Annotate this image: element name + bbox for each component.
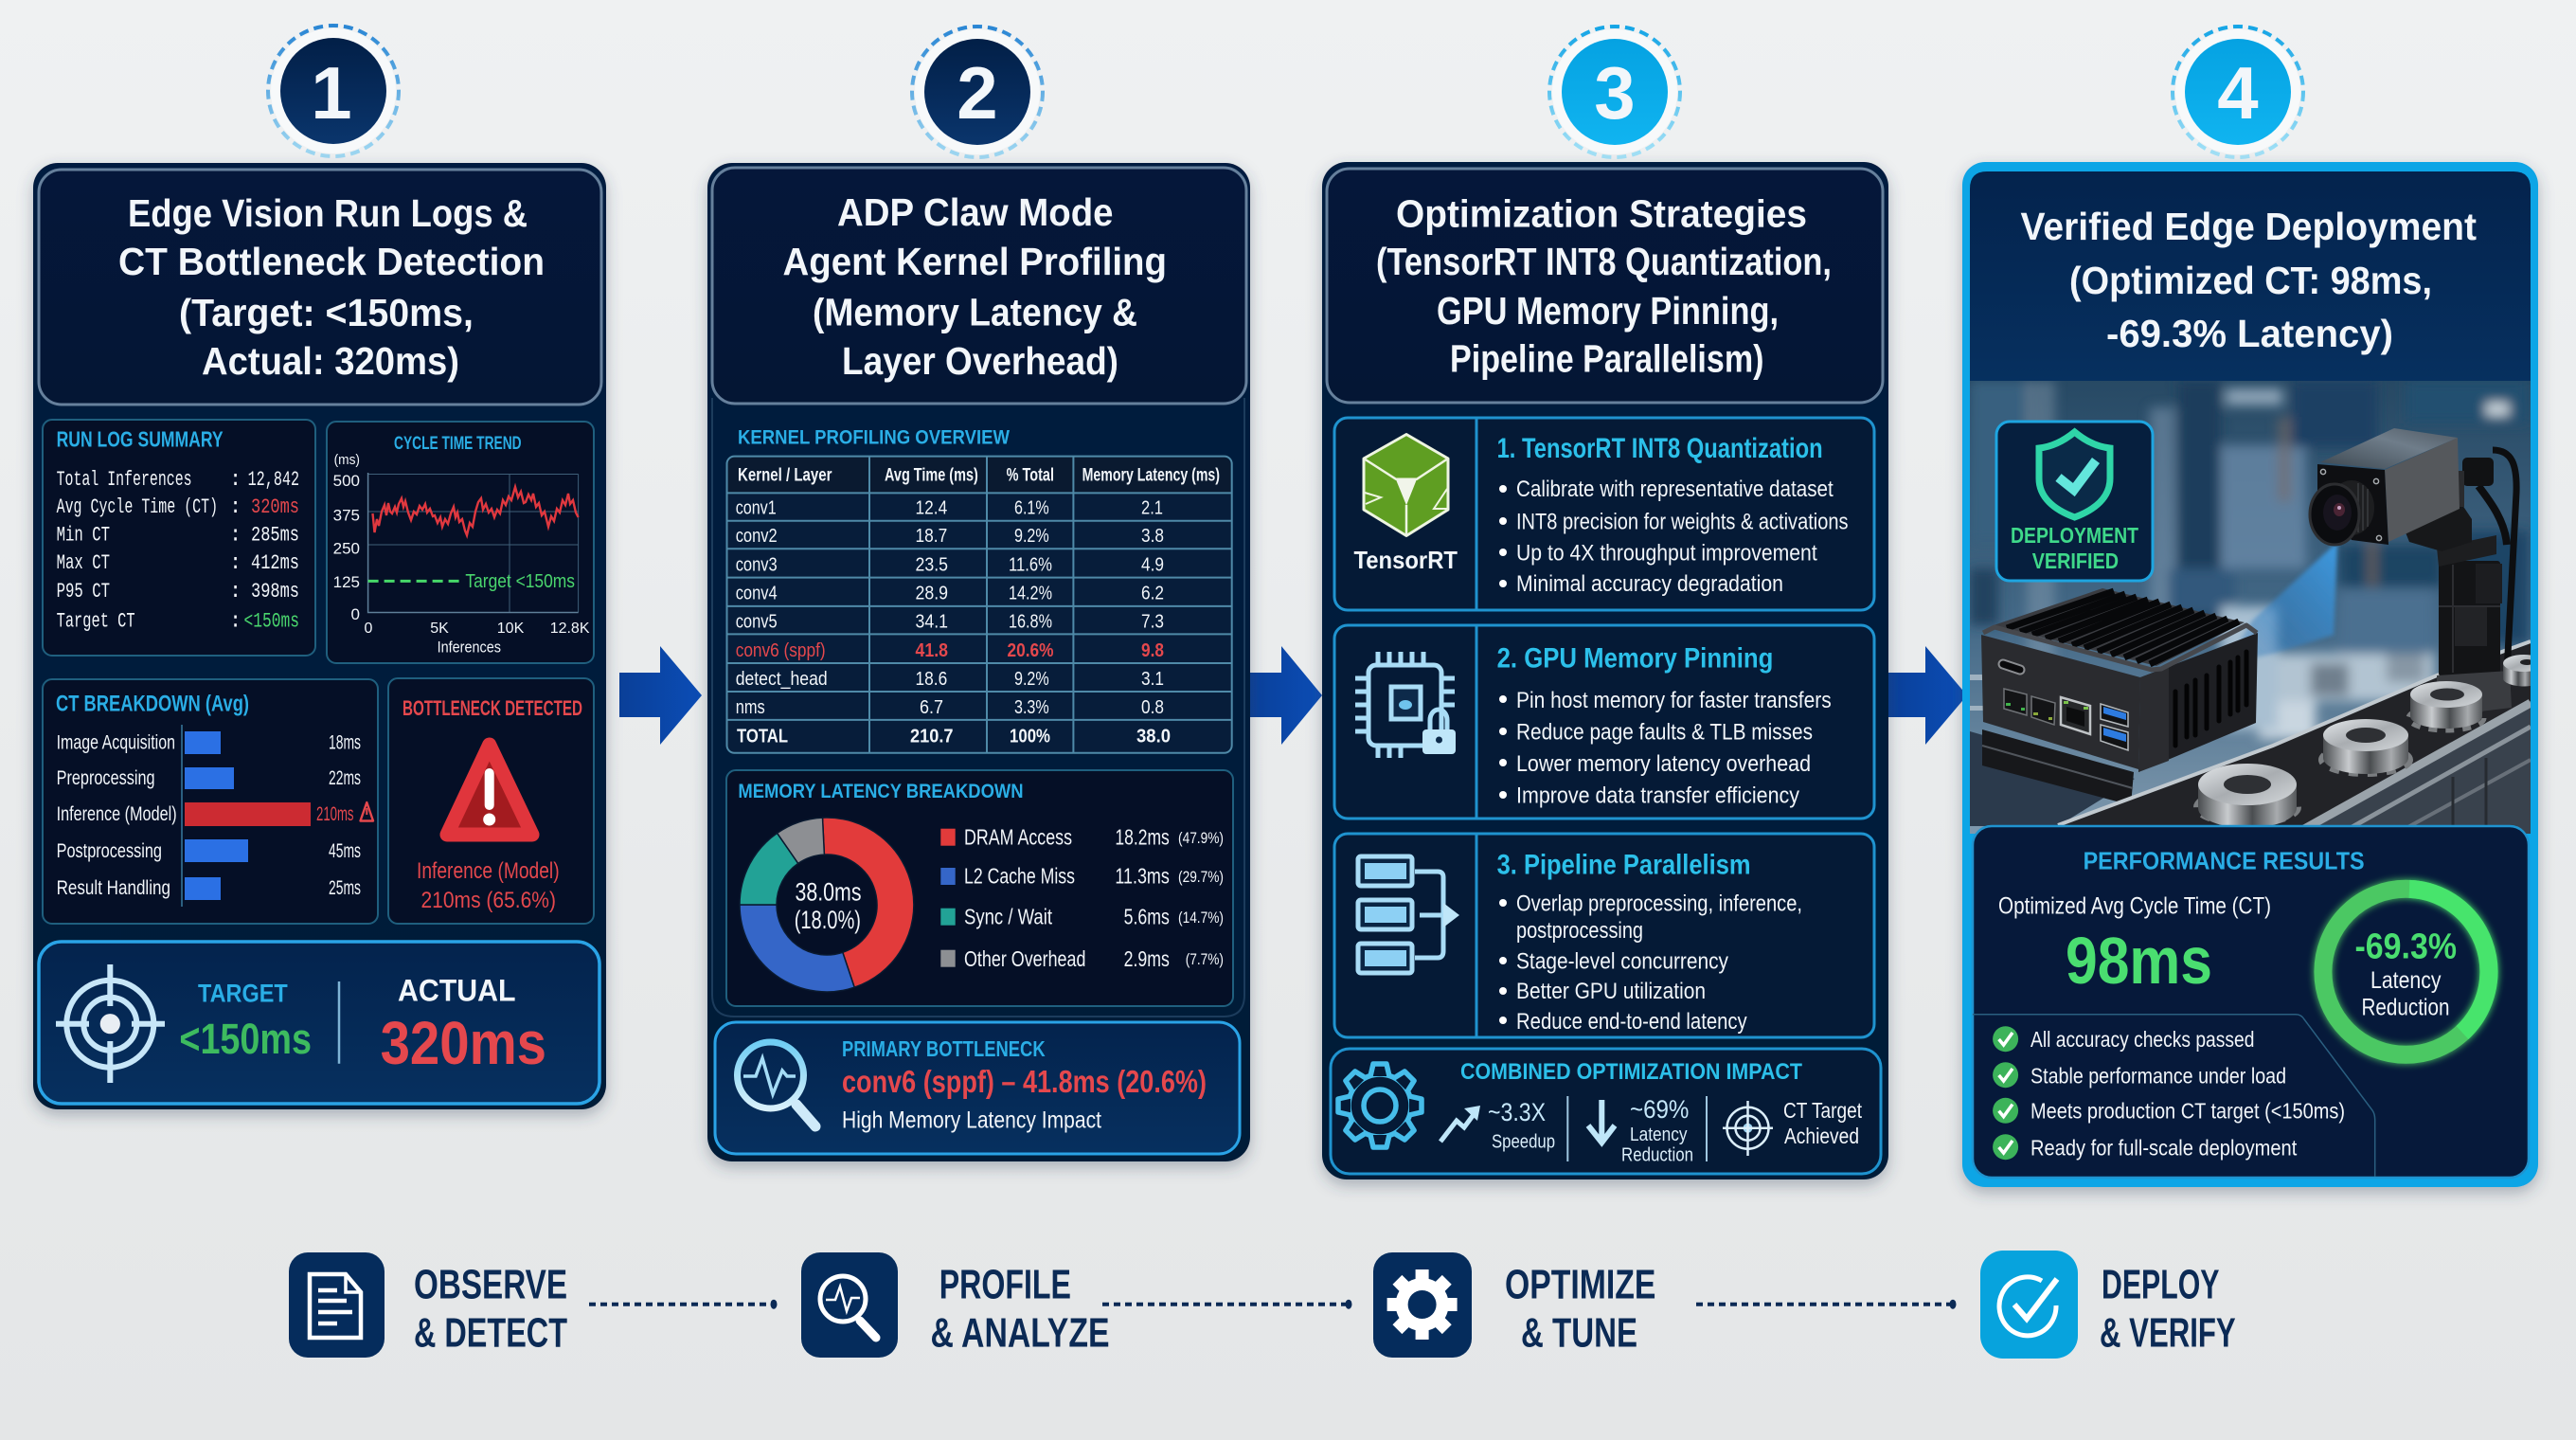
icon: down arrow [1588,1100,1615,1143]
card: TensorRT quantization: Calibrate with representative dataset [1516,477,1834,502]
run log summary: Target CT [57,610,135,634]
table: kernel profiling overview: 18.7 [915,526,947,547]
run log summary: : [229,610,242,634]
table: kernel profiling overview: detect_head [736,669,828,690]
chart: CT breakdown: Result Handling [57,877,170,899]
performance results [1973,826,2529,1178]
legend: DRAM Access [964,825,1072,850]
icon: gear [1387,1269,1458,1340]
photo: edge device and camera on conveyor [1970,379,2545,834]
arrow: step 2 to 3 [1246,646,1322,745]
panel: optimization strategies [1322,162,1888,1179]
card: pipeline parallelism [1334,834,1874,1037]
table: kernel profiling overview: conv5 [736,612,778,633]
bottom step: deploy and verify [1980,1251,2236,1359]
card: pipeline parallelism: 3. Pipeline Parallelism [1497,850,1751,881]
table: kernel profiling overview: Kernel / Layer [738,466,832,486]
table: kernel profiling overview: conv1 [736,498,777,519]
chart: cycle time trend: (ms) [334,452,360,468]
legend: Sync / Wait [964,905,1052,929]
card: pipeline parallelism: postprocessing [1516,918,1643,944]
table: kernel profiling overview: 7.3 [1141,612,1164,633]
bottom step: profile and analyze [801,1252,1110,1358]
run log summary: : [229,551,242,575]
step badge 3: 3 [1594,51,1636,135]
table: kernel profiling overview: 38.0 [1136,726,1171,747]
step badge 3 [1549,27,1680,157]
heading: panel 1: CT Bottleneck Detection [118,240,545,283]
table: kernel profiling overview: conv3 [736,554,778,575]
run log summary: : [229,495,242,519]
heading: panel 2: ADP Claw Mode [837,190,1114,234]
heading: panel 2: (Memory Latency & [813,291,1137,334]
heading: panel 4: (Optimized CT: 98ms, [2069,259,2432,302]
card: GPU memory pinning: Lower memory latency overhead [1516,751,1811,777]
chart: cycle time trend: 0 [351,605,360,623]
table: kernel profiling overview: 100% [1010,726,1050,747]
heading: panel 2: Layer Overhead) [842,339,1118,383]
table: kernel profiling overview: nms [736,697,765,718]
callout: target versus actual: <150ms [179,1015,312,1063]
table: kernel profiling overview: 3.1 [1141,669,1164,690]
step badge 4 [2173,27,2303,157]
chart: cycle time trend: 0 [365,621,373,637]
step badge 2 [912,27,1043,157]
chart: cycle time trend: 10K [497,621,525,637]
table: kernel profiling overview: % Total [1007,466,1054,486]
callout: combined optimization impact: Speedup [1492,1132,1555,1153]
callout: primary bottleneck: conv6 (sppf) – 41.8ms (20.6%) [842,1064,1207,1099]
chart: CT breakdown: 45ms [329,840,361,862]
card: pipeline parallelism: Better GPU utilization [1516,979,1706,1004]
chart: CT breakdown: Image Acquisition [57,732,175,754]
legend: 2.9ms [1124,946,1170,971]
heading: panel 4 [1970,171,2531,381]
run log summary: Max CT [57,551,110,575]
callout: primary bottleneck: High Memory Latency Impact [842,1107,1101,1134]
table: kernel profiling overview: 41.8 [915,640,948,661]
legend [940,825,1224,971]
run log summary: 412ms [251,551,299,575]
run log summary: Total Inferences [57,468,192,492]
card: GPU memory pinning [1334,625,1874,819]
bottom step: optimize and tune: OPTIMIZE [1505,1262,1655,1308]
bottleneck detected: 210ms (65.6%) [420,888,556,913]
icon: target [56,964,165,1083]
chart: CT breakdown: 210ms [316,803,354,825]
card: TensorRT quantization: INT8 precision for weights & activations [1516,510,1849,535]
card: TensorRT quantization: 1. TensorRT INT8 Quantization [1497,433,1823,464]
chart: CT breakdown: CT BREAKDOWN (Avg) [56,692,249,717]
bottom step: observe and detect [289,1252,567,1358]
table: kernel profiling overview: 23.5 [915,554,948,575]
checklist: Ready for full-scale deployment [2030,1135,2298,1160]
icon: pipeline [1358,856,1459,973]
callout: combined optimization impact: ~3.3X [1488,1098,1546,1126]
performance results: Latency [2370,967,2442,994]
heading: panel 4: Verified Edge Deployment [2021,205,2477,248]
gauge: latency reduction ring [2323,889,2489,1054]
table: kernel profiling overview: 0.8 [1141,697,1164,718]
dotted connector 2 [1102,1300,1352,1309]
table: kernel profiling overview: conv2 [736,526,778,547]
performance results: Reduction [2362,995,2449,1021]
chart: CT breakdown: 25ms [329,877,361,899]
callout: combined optimization impact: Achieved [1784,1124,1859,1148]
card: GPU memory pinning: Pin host memory for faster transfers [1516,688,1832,713]
callout: combined optimization impact: COMBINED OPTIMIZATION IMPACT [1460,1059,1802,1085]
bottleneck detected [388,678,594,924]
run log summary: 12,842 [248,468,299,492]
heading: panel 4: -69.3% Latency) [2106,312,2393,355]
callout: target versus actual: ACTUAL [398,974,515,1008]
edge computing box [1981,588,2258,772]
chart: cycle time trend: 375 [333,507,360,525]
checklist [1993,1026,2345,1160]
metal gear parts [2196,655,2545,828]
card: TensorRT quantization: TensorRT [1354,546,1458,574]
arrow: step 3 to 4 [1885,646,1967,745]
bottom step: deploy and verify: DEPLOY [2102,1262,2220,1308]
icon: document [310,1274,361,1338]
step badge 2: 2 [957,51,998,135]
legend: (7.7%) [1186,950,1224,968]
card: TensorRT quantization [1334,418,1874,610]
chart: cycle time trend: 500 [333,472,360,490]
run log summary: : [229,580,242,603]
step badge 4: 4 [2217,51,2259,135]
performance results: -69.3% [2354,927,2457,967]
table: kernel profiling overview: 16.8% [1009,612,1052,633]
legend: 18.2ms [1115,825,1170,850]
bottom step: optimize and tune [1373,1252,1655,1358]
table: kernel profiling overview: 6.2 [1141,583,1164,603]
table: kernel profiling overview: 6.7 [920,697,943,718]
table: kernel profiling overview: 14.2% [1009,583,1052,603]
chart: CT breakdown: Postprocessing [57,840,162,862]
performance results: Optimized Avg Cycle Time (CT) [1998,892,2271,919]
table: kernel profiling overview: 4.9 [1141,554,1164,575]
panel: verified edge deployment [1962,162,2545,1187]
icon: warning triangle [447,745,532,835]
chart: cycle time trend: 250 [333,540,360,557]
table: kernel profiling overview: TOTAL [737,726,788,747]
chart: CT breakdown: Inference (Model) [57,803,177,825]
heading: panel 2: Agent Kernel Profiling [782,240,1167,283]
chart: memory latency breakdown: (18.0%) [795,906,861,934]
performance results: PERFORMANCE RESULTS [2084,846,2365,874]
heading: panel 1: (Target: <150ms, [179,291,474,334]
card: GPU memory pinning: Improve data transfer efficiency [1516,783,1799,808]
callout: target versus actual: TARGET [198,980,288,1008]
table: kernel profiling overview: conv4 [736,583,778,603]
run log summary: Avg Cycle Time (CT) [57,495,218,519]
badge: deployment verified: VERIFIED [2032,549,2119,573]
bottom step: profile and analyze: & ANALYZE [930,1310,1110,1357]
table: kernel profiling overview: 20.6% [1008,640,1054,661]
icon: magnifier [820,1276,876,1338]
table: kernel profiling overview [727,427,1232,753]
checklist: All accuracy checks passed [2030,1027,2254,1052]
run log summary: RUN LOG SUMMARY [57,426,224,451]
table: kernel profiling overview: 6.1% [1014,498,1049,519]
table: kernel profiling overview: 2.1 [1141,498,1163,519]
heading: panel 1: Actual: 320ms) [202,339,459,383]
legend: (47.9%) [1178,829,1224,847]
callout: combined optimization impact: ~69% [1630,1095,1689,1124]
run log summary: 285ms [251,524,299,548]
run log summary: : [229,524,242,548]
bottleneck detected: BOTTLENECK DETECTED [402,696,582,720]
table: kernel profiling overview: 3.8 [1141,526,1164,547]
heading: panel 1 [39,170,601,405]
callout: primary bottleneck [715,1022,1240,1154]
table: kernel profiling overview: Memory Latency (ms) [1082,466,1220,486]
icon: chip with lock [1355,652,1456,758]
run log summary: 398ms [251,580,299,603]
table: kernel profiling overview: 34.1 [915,612,948,633]
checklist: Stable performance under load [2030,1063,2286,1088]
run log summary [43,420,315,656]
table: kernel profiling overview: 3.3% [1014,697,1049,718]
table: kernel profiling overview: 18.6 [915,669,947,690]
legend: 11.3ms [1115,864,1170,889]
donut chart [740,818,914,992]
legend: (14.7%) [1178,909,1224,927]
table: kernel profiling overview: 9.8 [1141,640,1164,661]
table: kernel profiling overview: 9.2% [1014,669,1049,690]
run log summary: 320ms [251,495,299,519]
heading: panel 3: GPU Memory Pinning, [1437,289,1779,333]
card: TensorRT quantization: Minimal accuracy degradation [1516,571,1783,597]
bottom step: profile and analyze: PROFILE [939,1262,1071,1308]
badge: deployment verified [1996,422,2153,581]
legend: (29.7%) [1178,868,1224,886]
icon: TensorRT cube [1364,434,1448,536]
chart: cycle time trend: CYCLE TIME TREND [394,434,522,454]
heading: panel 3: Pipeline Parallelism) [1450,336,1763,380]
card: GPU memory pinning: 2. GPU Memory Pinning [1497,643,1773,675]
run log summary: P95 CT [57,580,110,603]
legend: L2 Cache Miss [964,864,1075,889]
chart: cycle time trend: 5K [430,621,449,637]
chart: CT breakdown: Preprocessing [57,767,155,789]
table: kernel profiling overview: 12.4 [915,498,947,519]
chart: memory latency breakdown: 38.0ms [796,878,862,907]
bottom step: observe and detect: OBSERVE [414,1262,567,1308]
table: kernel profiling overview: 210.7 [910,726,953,747]
legend: Other Overhead [964,946,1085,971]
heading: panel 3: Optimization Strategies [1396,191,1807,235]
callout: combined optimization impact: Latency [1630,1125,1688,1145]
bottom step: observe and detect: & DETECT [414,1310,567,1357]
step badge 1: 1 [311,51,352,135]
card: pipeline parallelism: Reduce end-to-end latency [1516,1009,1747,1035]
card: GPU memory pinning: Reduce page faults & TLB misses [1516,719,1813,745]
chart: cycle time trend: Inferences [438,639,501,657]
table: kernel profiling overview: KERNEL PROFILING OVERVIEW [738,427,1010,449]
badge: deployment verified: DEPLOYMENT [2011,523,2138,548]
bottom step: optimize and tune: & TUNE [1521,1310,1637,1357]
card: pipeline parallelism: Stage-level concurrency [1516,949,1728,975]
chart: cycle time trend: 12.8K [550,621,590,637]
legend: 5.6ms [1124,905,1170,929]
callout: primary bottleneck: PRIMARY BOTTLENECK [842,1036,1046,1061]
step badge 1 [268,26,399,156]
callout: target versus actual [39,942,599,1104]
light cone [2239,546,2339,659]
bottom step: deploy and verify: & VERIFY [2100,1310,2236,1357]
table: kernel profiling overview: 28.9 [915,583,948,603]
card: TensorRT quantization: Up to 4X throughput improvement [1516,541,1817,567]
table: kernel profiling overview: Avg Time (ms) [885,466,978,486]
callout: combined optimization impact: Reduction [1621,1145,1693,1166]
heading: panel 3 [1327,169,1883,403]
chart: CT breakdown: 22ms [329,767,361,789]
table: kernel profiling overview: 9.2% [1014,526,1049,547]
performance results: 98ms [2066,924,2212,998]
checklist: Meets production CT target (<150ms) [2030,1099,2345,1124]
icon: magnifier with pulse [737,1042,815,1126]
dotted connector 1 [589,1300,777,1309]
icon: small target [1723,1101,1773,1156]
callout: combined optimization impact: CT Target [1783,1098,1862,1123]
chart: CT breakdown: 18ms [329,732,361,754]
chart: cycle time trend: Target <150ms [465,571,575,592]
icon: speedup arrow [1440,1106,1480,1142]
chart: memory latency breakdown: MEMORY LATENCY BREAKDOWN [738,781,1024,802]
callout: combined optimization impact [1331,1049,1881,1174]
heading: panel 2 [712,168,1246,404]
chart: cycle time trend: 125 [333,573,360,591]
table: kernel profiling overview: conv6 (sppf) [736,640,826,661]
panel: kernel profiling [707,163,1250,1161]
callout: target versus actual: 320ms [381,1009,546,1077]
heading: panel 3: (TensorRT INT8 Quantization, [1376,240,1832,283]
dotted connector 3 [1696,1300,1957,1309]
run log summary: <150ms [244,610,299,634]
chart: CT breakdown [43,679,378,924]
icon: check circle [1999,1277,2057,1336]
bottleneck detected: Inference (Model) [417,858,560,884]
heading: panel 1: Edge Vision Run Logs & [128,191,528,235]
camera on post [2310,428,2516,712]
table: kernel profiling overview: 11.6% [1009,554,1052,575]
chart: memory latency breakdown [726,770,1233,1006]
card: pipeline parallelism: Overlap preprocessing, inference, [1516,891,1802,917]
run log summary: : [229,468,242,492]
chart: cycle time trend [327,422,594,663]
icon: gear outline [1338,1064,1422,1147]
conveyor belt [2058,641,2531,834]
panel: run logs and bottleneck detection [33,163,606,1109]
run log summary: Min CT [57,524,110,548]
arrow: step 1 to 2 [619,646,702,745]
